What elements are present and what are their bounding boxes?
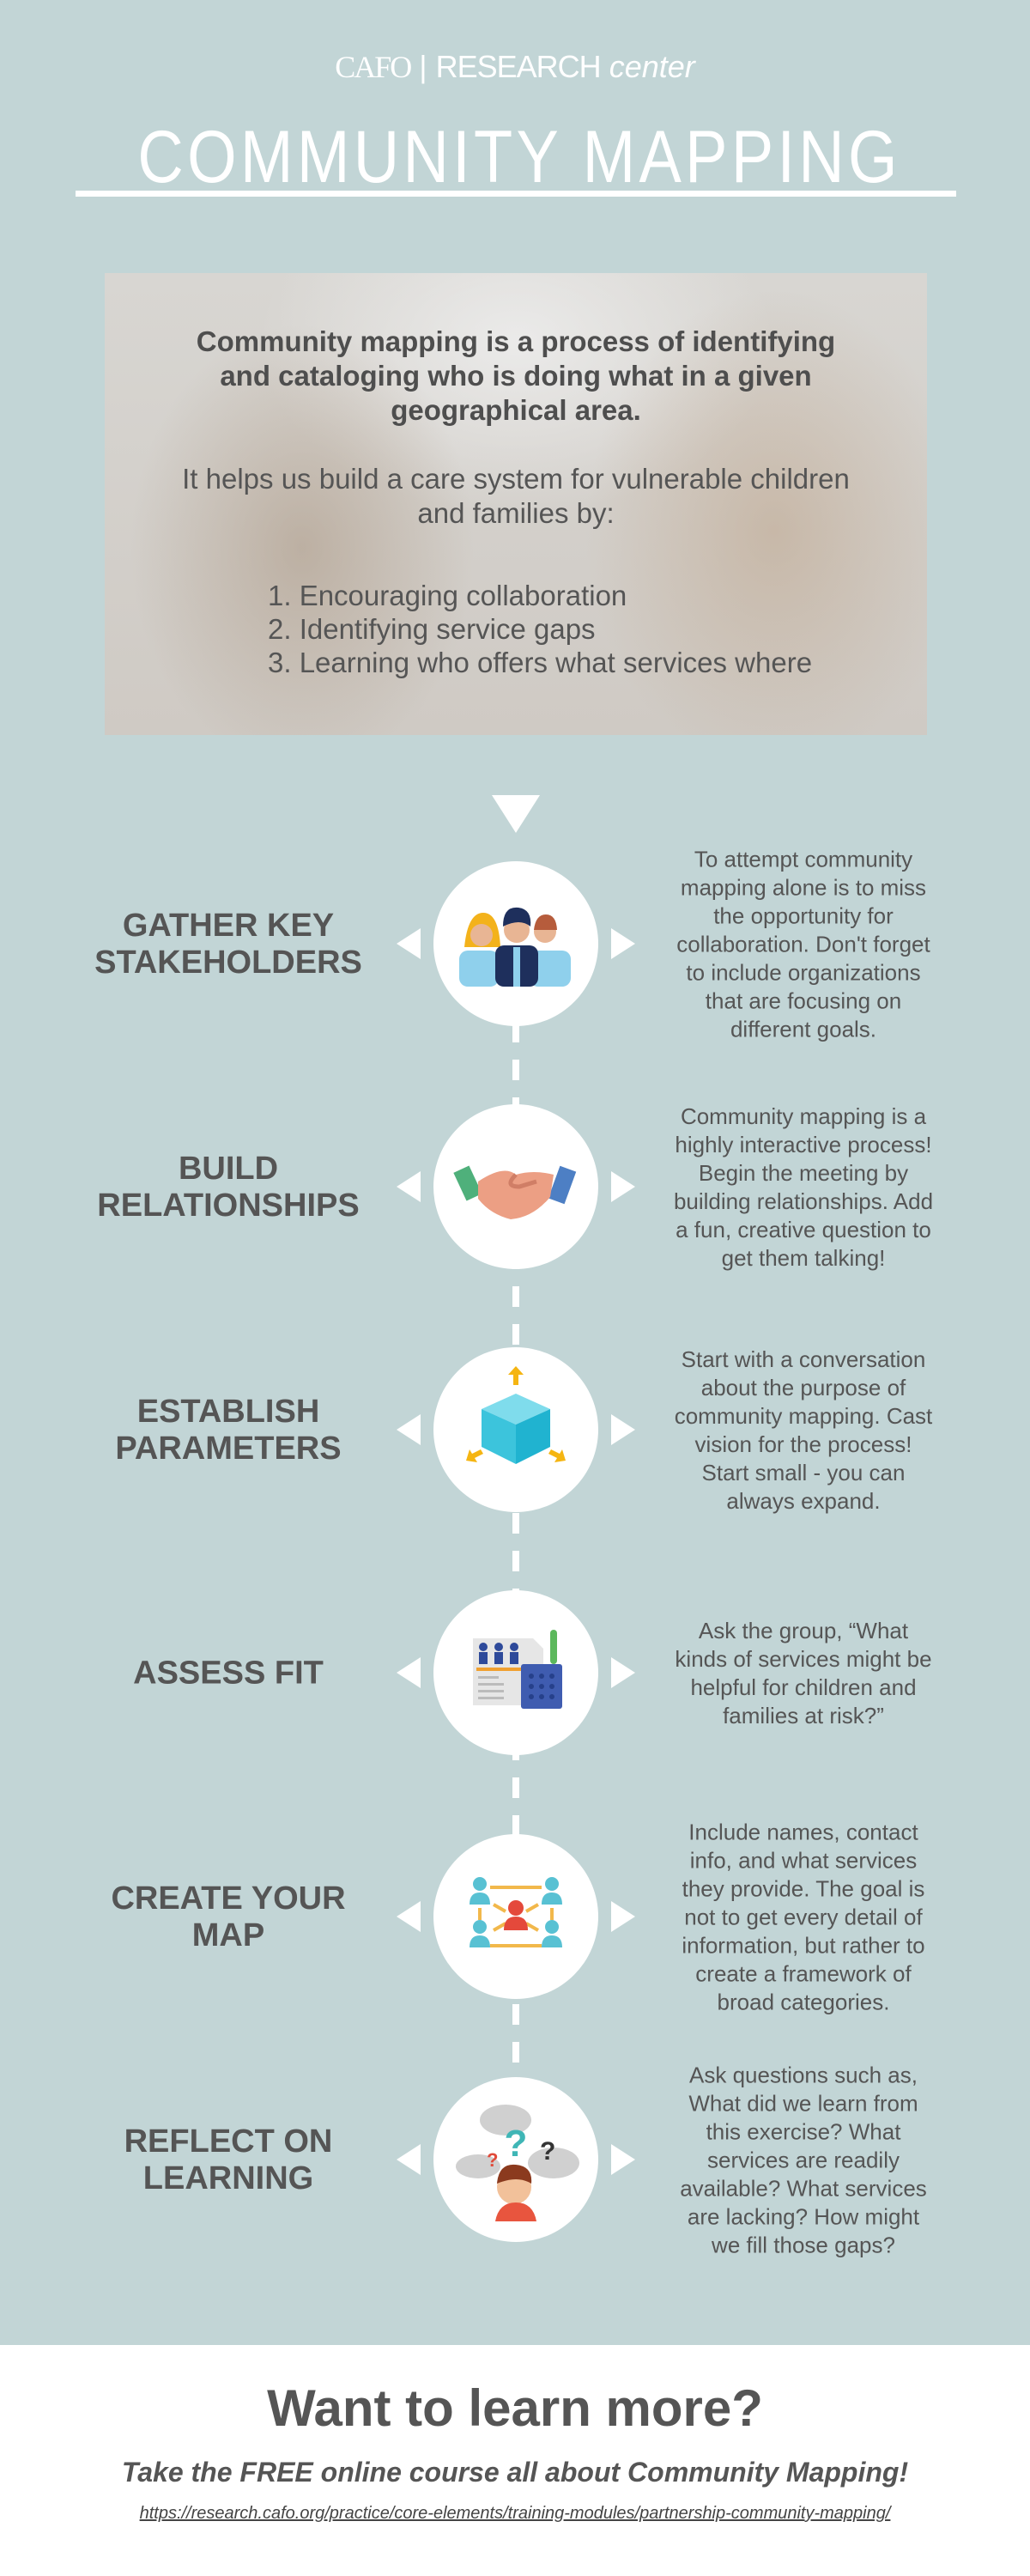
heading: assess fit: ASSESS FIT [133, 1655, 324, 1691]
description: vision for the process! [695, 1431, 912, 1456]
description: helpful for children and [690, 1674, 917, 1700]
description: info, and what services [690, 1847, 917, 1873]
description: mapping alone is to miss [681, 874, 926, 900]
description: Community mapping is a [681, 1103, 926, 1128]
step 3 [115, 1346, 932, 1513]
description: they provide. The goal is [682, 1875, 924, 1901]
description: Ask the group, “What [699, 1618, 908, 1643]
title: COMMUNITY MAPPING [137, 116, 901, 198]
description: Ask questions such as, [689, 2062, 918, 2087]
numbered list: 2. Identifying service gaps [268, 613, 596, 645]
arrow left [397, 2144, 421, 2175]
arrow right [611, 2144, 635, 2175]
description [675, 1346, 932, 1513]
icon: document and calculator [433, 1590, 598, 1755]
description: the opportunity for [713, 902, 894, 928]
description [675, 1618, 932, 1728]
description: Include names, contact [688, 1819, 918, 1844]
description: that are focusing on [706, 987, 901, 1013]
icon: cube [433, 1347, 598, 1512]
heading: create your map: CREATE YOUR [111, 1880, 346, 1917]
description: Begin the meeting by [699, 1159, 908, 1185]
description: Start small - you can [702, 1460, 905, 1485]
icon: network of people [433, 1834, 598, 1999]
icon: questioning child: ? [505, 2123, 527, 2165]
footer subheading: Take the FREE online course all about Community Mapping! [122, 2457, 908, 2488]
description: not to get every detail of [684, 1904, 923, 1929]
heading: establish parameters: PARAMETERS [115, 1431, 342, 1467]
heading: build relationships [97, 1151, 360, 1223]
step 1 [94, 846, 930, 1042]
heading: gather key stakeholders: GATHER KEY [123, 907, 334, 943]
icon: questioning child: ? [487, 2149, 498, 2171]
description: collaboration. Don't forget [676, 931, 930, 957]
description: Start with a conversation [682, 1346, 925, 1372]
numbered list: 3. Learning who offers what services where [268, 647, 812, 678]
arrow right [611, 1901, 635, 1932]
arrow right [611, 1171, 635, 1202]
description: What did we learn from [688, 2090, 918, 2116]
description: highly interactive process! [675, 1132, 932, 1157]
arrow left [397, 928, 421, 959]
step 5 [111, 1819, 925, 2014]
heading: establish parameters: ESTABLISH [137, 1393, 319, 1429]
description: broad categories. [718, 1989, 889, 2014]
description [680, 2062, 927, 2257]
step 4 [133, 1590, 932, 1755]
description: building relationships. Add [674, 1188, 933, 1214]
description: are lacking? How might [688, 2203, 919, 2229]
intro subtext: and families by: [417, 497, 615, 529]
description: kinds of services might be [675, 1645, 932, 1671]
heading: establish parameters [115, 1393, 342, 1467]
arrow right [611, 1414, 635, 1445]
heading: build relationships: BUILD [179, 1151, 278, 1187]
intro subtext: It helps us build a care system for vulnerable children [182, 463, 850, 495]
description [674, 1103, 933, 1271]
footer heading: Want to learn more? [267, 2379, 763, 2437]
description: services are readily [707, 2147, 900, 2172]
description: To attempt community [694, 846, 912, 872]
arrow left [397, 1171, 421, 1202]
description: we fill those gaps? [712, 2232, 895, 2257]
description: available? What services [680, 2175, 927, 2201]
arrow left [397, 1901, 421, 1932]
icon: handshake [433, 1104, 598, 1269]
description: families at risk?” [723, 1702, 884, 1728]
icon: questioning child [433, 2077, 598, 2242]
description: information, but rather to [682, 1932, 925, 1958]
description: to include organizations [686, 959, 921, 985]
arrow right [611, 928, 635, 959]
description: this exercise? What [706, 2118, 900, 2144]
intro bold statement [197, 325, 835, 426]
footer url: https://research.cafo.org/practice/core-elements/training-modules/partnership-community-mapping/ [140, 2504, 890, 2523]
step 2 [97, 1103, 933, 1271]
intro subtext [182, 463, 850, 529]
heading: reflect on learning [124, 2123, 332, 2196]
description: about the purpose of [701, 1374, 906, 1400]
description: different goals. [730, 1016, 876, 1042]
icon: questioning child: ? [540, 2137, 555, 2166]
arrow right [611, 1657, 635, 1688]
icon: people [433, 861, 598, 1026]
logo: CAFO | RESEARCH center [335, 49, 695, 84]
heading: reflect on learning: LEARNING [143, 2160, 313, 2196]
heading: gather key stakeholders: STAKEHOLDERS [94, 945, 362, 981]
intro bold statement: Community mapping is a process of identifying [197, 325, 835, 357]
numbered list [268, 580, 812, 678]
intro bold statement: geographical area. [391, 394, 641, 426]
heading: create your map: MAP [192, 1917, 264, 1953]
description: a fun, creative question to [676, 1216, 931, 1242]
heading: gather key stakeholders [94, 907, 362, 981]
description [682, 1819, 925, 2014]
description: get them talking! [722, 1245, 885, 1271]
intro panel with blurred photo [105, 273, 927, 735]
heading: create your map [111, 1880, 346, 1953]
numbered list: 1. Encouraging collaboration [268, 580, 627, 611]
arrow left [397, 1414, 421, 1445]
description [676, 846, 930, 1042]
arrow left [397, 1657, 421, 1688]
dashed connector line [512, 1025, 519, 2063]
heading: reflect on learning: REFLECT ON [124, 2123, 332, 2159]
description: always expand. [726, 1487, 881, 1513]
intro bold statement: and cataloging who is doing what in a given [220, 360, 812, 392]
description: community mapping. Cast [675, 1403, 932, 1429]
description: create a framework of [695, 1960, 912, 1986]
arrow: down triangle [492, 795, 540, 833]
footer panel [0, 2345, 1030, 2576]
step 6 [124, 2062, 927, 2257]
heading: build relationships: RELATIONSHIPS [97, 1187, 360, 1223]
